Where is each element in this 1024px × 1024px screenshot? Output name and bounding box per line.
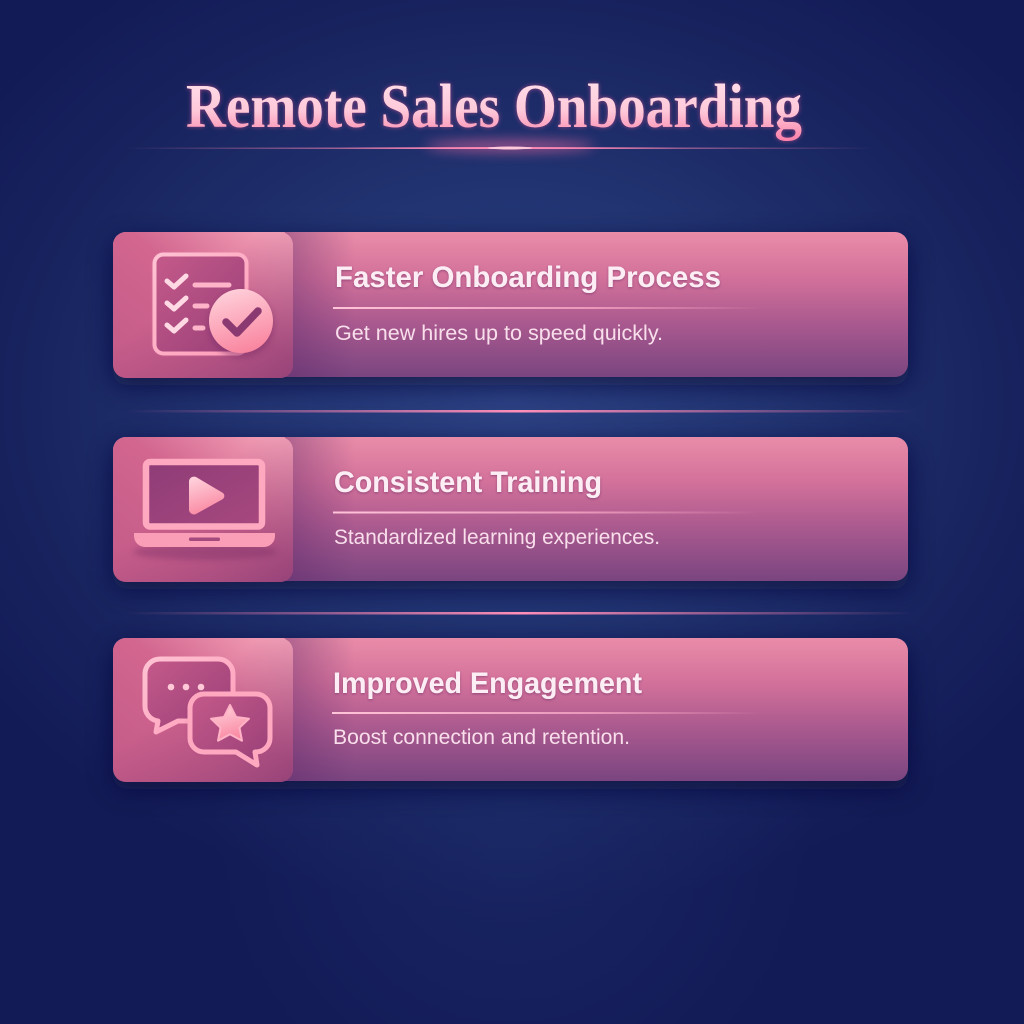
icon tile: chat bubbles (113, 638, 293, 782)
heading: Faster Onboarding Process (335, 261, 721, 294)
icon: chat bubbles with star (145, 659, 270, 765)
title underline glow (125, 140, 875, 152)
title: Remote Sales Onboarding (186, 73, 802, 141)
icon: laptop with play button (133, 462, 277, 560)
title: Remote Sales Onboarding (186, 73, 802, 141)
separator (125, 612, 915, 614)
icon tile: checklist (113, 232, 293, 378)
panel: faster onboarding process (113, 232, 908, 385)
panel: improved engagement (113, 638, 908, 789)
icon: checklist document with check badge (154, 254, 274, 358)
description: Get new hires up to speed quickly. (335, 321, 663, 345)
panel: consistent training (113, 437, 908, 589)
icon tile: laptop (113, 437, 293, 582)
divider line (333, 307, 763, 309)
heading: Consistent Training (334, 466, 602, 499)
divider line (333, 512, 758, 514)
description: Standardized learning experiences. (334, 525, 660, 549)
heading: Improved Engagement (333, 667, 642, 700)
description: Boost connection and retention. (333, 725, 630, 749)
separator (125, 410, 915, 412)
divider line (332, 712, 760, 714)
